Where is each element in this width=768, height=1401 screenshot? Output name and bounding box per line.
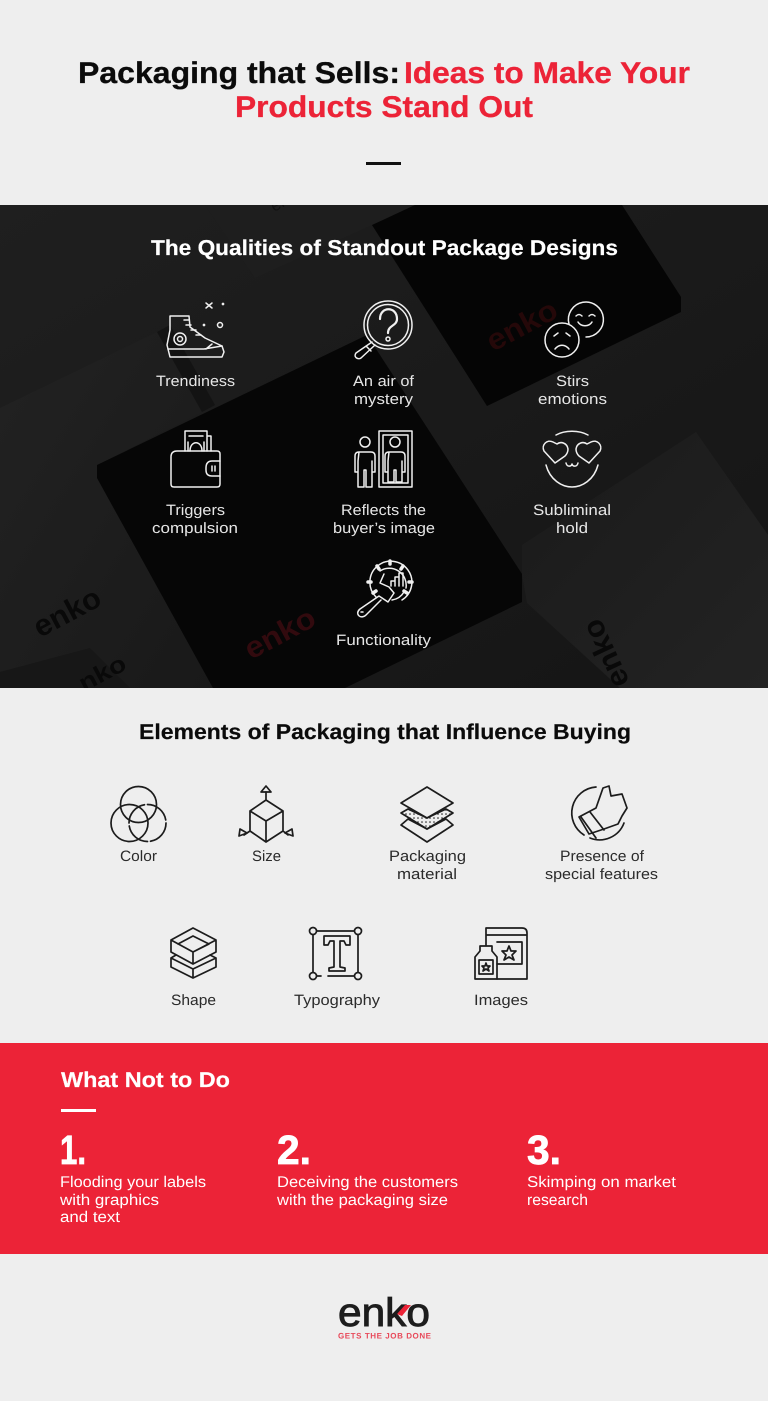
panel: what not to do xyxy=(0,1043,768,1254)
point 1: and text xyxy=(60,1209,121,1226)
point 1: 1. xyxy=(60,1127,86,1173)
item: subliminal hold: Subliminal xyxy=(533,502,611,519)
item: typography xyxy=(294,928,381,1009)
photo background: dark boxes: enko xyxy=(481,293,563,358)
photo background: dark boxes: enko xyxy=(268,184,308,216)
point 2: with the packaging size xyxy=(276,1192,448,1209)
item: size xyxy=(239,786,293,865)
photo background: dark boxes xyxy=(0,184,768,697)
item: stirs emotions: Stirs xyxy=(556,373,589,390)
item: color: Color xyxy=(120,848,157,865)
item: shape: Shape xyxy=(171,992,216,1009)
icon: thumbs up in circle xyxy=(572,786,627,840)
heading: elements: Elements of Packaging that Influence Buying xyxy=(139,720,631,744)
photo background: dark boxes: enko xyxy=(28,581,107,644)
icon: person at mirror xyxy=(355,431,412,487)
panel: elements of packaging xyxy=(111,720,658,1009)
icon: wallet with cash xyxy=(171,431,220,487)
icon: happy and sad faces xyxy=(545,302,603,357)
logo: enko: GETS THE JOB DONE xyxy=(338,1332,432,1340)
icon: gear, wrench and chart xyxy=(358,561,412,617)
point 1 xyxy=(59,1127,206,1226)
point 3 xyxy=(527,1127,677,1209)
item: stirs emotions: emotions xyxy=(538,391,607,408)
title divider xyxy=(366,162,401,165)
panel: qualities of standout package designs xyxy=(0,184,768,697)
item: an air of mystery: An air of xyxy=(353,373,415,390)
item: subliminal hold xyxy=(533,431,611,537)
item: triggers compulsion: Triggers xyxy=(166,502,225,519)
item: functionality: Functionality xyxy=(336,632,432,649)
title: Ideas to Make Your xyxy=(404,57,690,90)
item: images xyxy=(474,928,528,1009)
point 2: Deceiving the customers xyxy=(277,1174,458,1191)
icon: stacked layers xyxy=(401,787,453,842)
point 3: Skimping on market xyxy=(527,1174,677,1191)
icon: letter T in frame xyxy=(310,928,362,980)
icon: magnifier with question mark xyxy=(355,301,412,359)
point 1: Flooding your labels xyxy=(60,1174,206,1191)
item: an air of mystery: mystery xyxy=(354,391,414,408)
heading: qualities: The Qualities of Standout Package Designs xyxy=(151,236,618,260)
title xyxy=(78,57,690,124)
item: reflects the buyer's image xyxy=(333,431,435,537)
icon: bottle and box with stars xyxy=(475,928,527,979)
item: typography: Typography xyxy=(294,992,381,1009)
item: packaging material: Packaging xyxy=(389,848,466,865)
item: presence of special features xyxy=(545,786,658,883)
item: stirs emotions xyxy=(538,302,607,408)
item: packaging material xyxy=(389,787,466,883)
point 2 xyxy=(276,1127,458,1209)
icon: overlapping circles xyxy=(111,786,166,842)
item: trendiness xyxy=(156,303,235,390)
item: trendiness: Trendiness xyxy=(156,373,235,390)
item: presence of special features: Presence of xyxy=(560,848,645,865)
photo background: dark boxes: enko xyxy=(576,614,636,693)
item: functionality xyxy=(336,561,432,649)
item: triggers compulsion: compulsion xyxy=(152,520,238,537)
title: Packaging that Sells: xyxy=(78,57,400,90)
logo: enko: enko xyxy=(338,1291,430,1335)
title: Products Stand Out xyxy=(235,91,533,124)
item: subliminal hold: hold xyxy=(556,520,588,537)
item: packaging material: material xyxy=(397,866,457,883)
item: presence of special features: special features xyxy=(545,866,658,883)
icon: sneaker xyxy=(167,303,224,357)
item: shape xyxy=(171,928,216,1009)
item: triggers compulsion xyxy=(152,431,238,537)
point 3: 3. xyxy=(527,1127,561,1173)
photo background: dark boxes: nko xyxy=(74,650,131,697)
item: images: Images xyxy=(474,992,528,1009)
icon: cube with arrows xyxy=(239,786,293,842)
item: size: Size xyxy=(252,848,281,865)
item: reflects the buyer's image: Reflects the xyxy=(341,502,426,519)
item: an air of mystery xyxy=(353,301,415,408)
item: color xyxy=(111,786,166,865)
point 3: research xyxy=(527,1192,588,1209)
item: reflects the buyer's image: buyer’s image xyxy=(333,520,435,537)
point 2: 2. xyxy=(277,1127,311,1173)
point 1: with graphics xyxy=(59,1192,159,1209)
heading: what not to do: What Not to Do xyxy=(61,1068,230,1092)
icon: stacked open boxes xyxy=(171,928,216,978)
icon: heart-eyes face xyxy=(543,431,601,487)
photo background: dark boxes: enko xyxy=(239,601,321,666)
